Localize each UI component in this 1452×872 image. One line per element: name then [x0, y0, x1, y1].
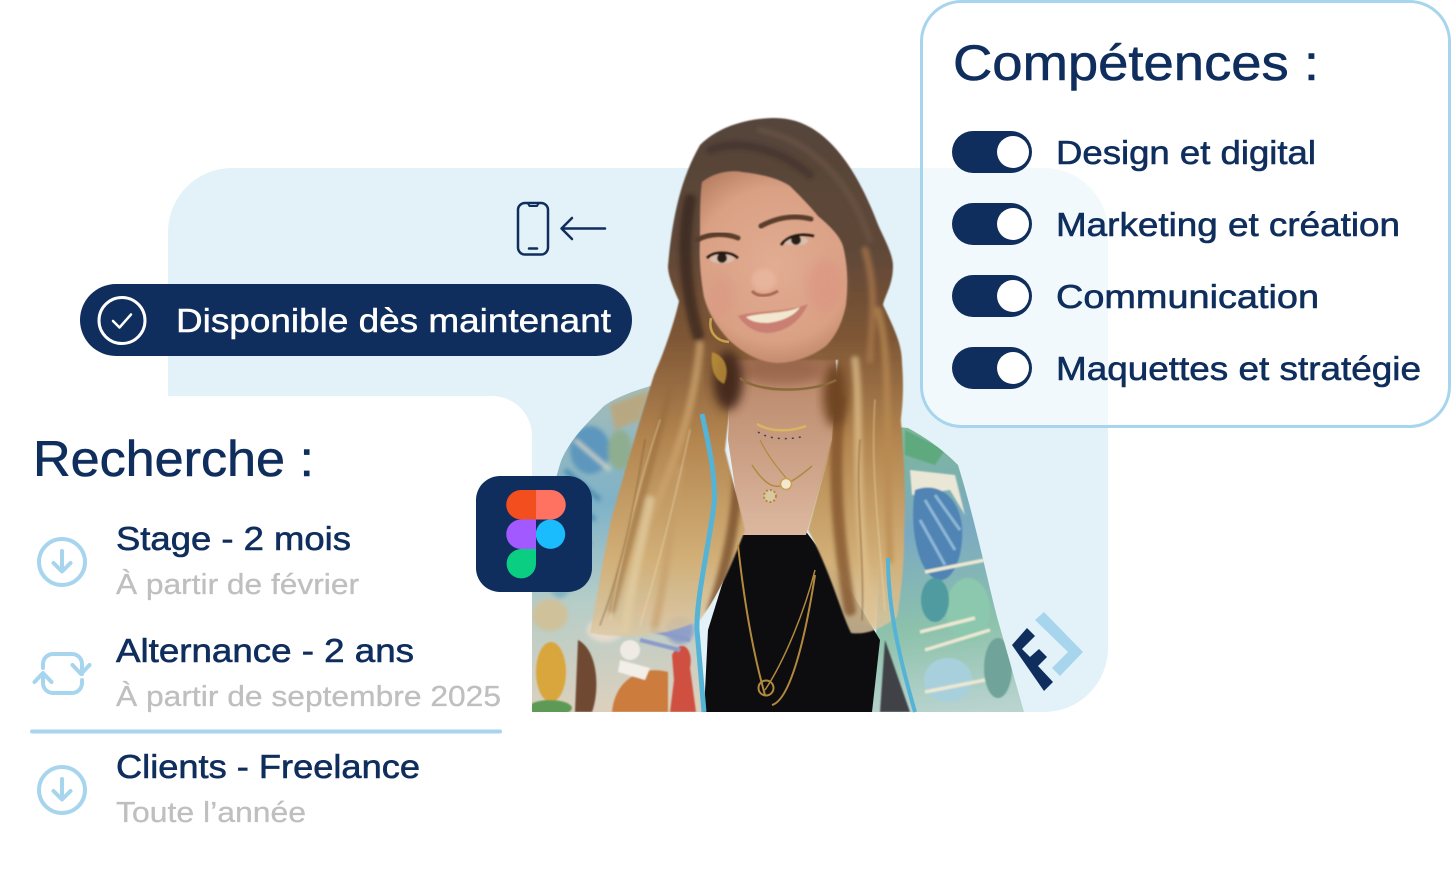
skill: communication	[952, 275, 1319, 317]
list item: stage: À partir de février	[116, 568, 359, 601]
list item: alternance: Alternance - 2 ans	[116, 632, 414, 669]
panel: light blue background	[168, 168, 1108, 712]
skill: communication: Communication	[1056, 278, 1319, 315]
skill: marketing: Marketing et création	[1056, 206, 1400, 243]
logo: F chevron	[1012, 612, 1083, 691]
jacket zipper right	[888, 558, 915, 712]
jacket zipper left	[697, 414, 714, 712]
pill: availability: Disponible dès maintenant	[176, 302, 611, 339]
list item: stage: Stage - 2 mois	[116, 520, 351, 557]
pill: availability	[80, 284, 632, 356]
icon: download circle 2	[39, 767, 85, 813]
list item: alternance	[34, 632, 501, 713]
photo: smiling woman	[528, 118, 1030, 716]
icon: download circle	[39, 539, 85, 585]
pendants	[764, 478, 792, 502]
earring	[710, 318, 729, 342]
skill: design	[952, 131, 1316, 173]
list item: stage	[39, 520, 359, 601]
list item: clients	[39, 748, 420, 829]
icon: check circle	[99, 298, 145, 344]
heading: Compétences: Compétences :	[953, 35, 1319, 91]
eyebrows	[697, 234, 738, 240]
necklaces	[738, 378, 836, 705]
list item: alternance: À partir de septembre 2025	[116, 680, 501, 713]
jacket left side	[532, 386, 702, 712]
panel: recherche (white)	[0, 396, 532, 872]
skill: design: Design et digital	[1056, 134, 1316, 171]
eyes	[707, 235, 814, 264]
smile	[738, 304, 808, 333]
jacket right side	[870, 420, 1030, 715]
nose	[752, 269, 776, 291]
icon: loop arrows	[34, 654, 90, 693]
hair	[590, 118, 905, 636]
face	[697, 171, 847, 363]
skill: maquettes	[952, 347, 1421, 389]
heading: Recherche: Recherche :	[33, 431, 314, 487]
skill: maquettes: Maquettes et stratégie	[1056, 350, 1421, 387]
icon: figma badge	[476, 476, 592, 592]
black top	[704, 529, 880, 712]
list item: clients: Clients - Freelance	[116, 748, 420, 785]
neck and chest	[728, 345, 838, 535]
list item: clients: Toute l’année	[116, 797, 306, 829]
panel: compétences	[922, 2, 1450, 426]
icon: phone with arrow	[518, 203, 605, 254]
skill: marketing	[952, 203, 1400, 245]
